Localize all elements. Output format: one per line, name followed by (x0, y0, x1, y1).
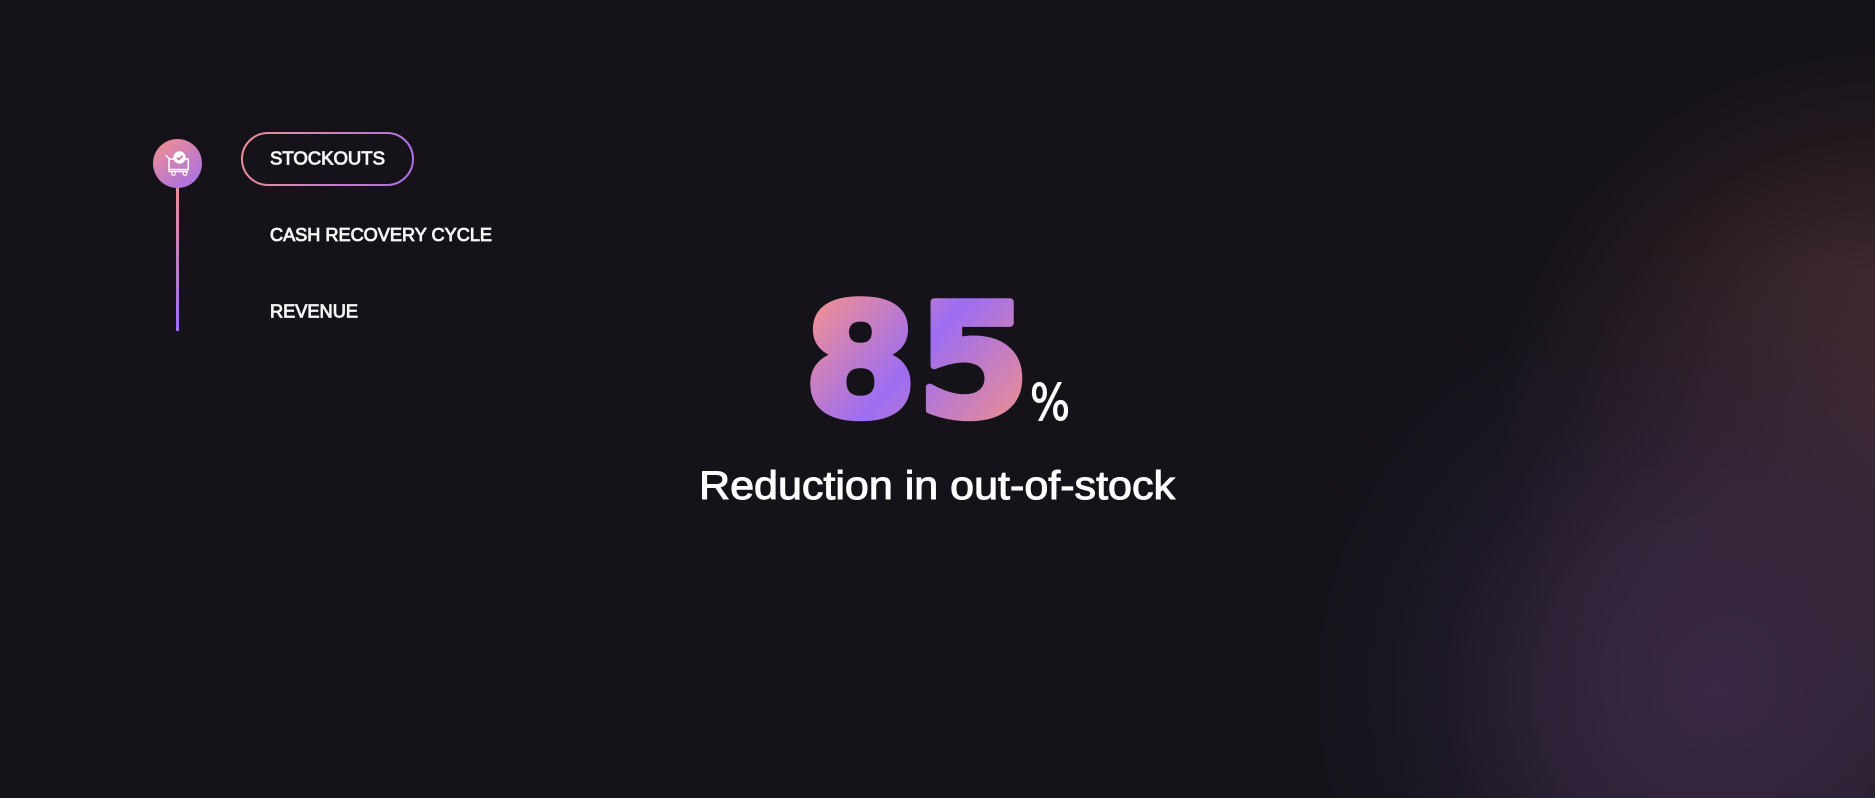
navigation tab: stockouts (active): STOCKOUTS (270, 148, 385, 168)
stat caption: Reduction in out-of-stock (699, 464, 1176, 508)
icon: shopping cart with check badge (153, 139, 202, 188)
timeline connector line (176, 186, 179, 331)
navigation tab: cash recovery cycle: CASH RECOVERY CYCLE (270, 225, 492, 245)
big stat: 85 percent: 85 (804, 270, 1030, 452)
big stat: 85 percent: % (1030, 374, 1070, 432)
navigation tab: revenue: REVENUE (270, 302, 358, 322)
navigation tab: stockouts (active) (242, 133, 413, 185)
